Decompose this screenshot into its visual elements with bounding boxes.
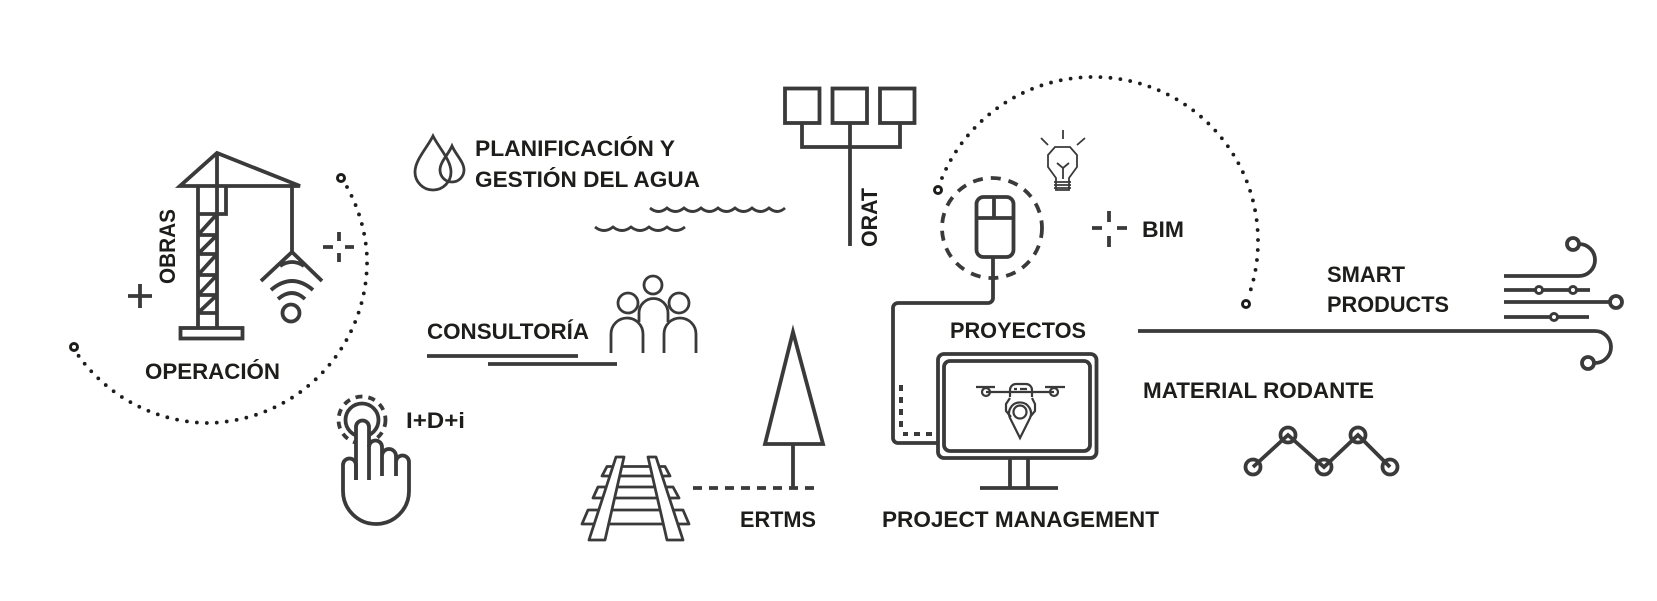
- label: ERTMS: ERTMS: [740, 507, 816, 532]
- icon: org chart: [785, 88, 914, 246]
- label: MATERIAL RODANTE: MATERIAL RODANTE: [1143, 378, 1374, 403]
- icon: tower crane: [180, 153, 300, 338]
- label: SMART PRODUCTS: SMART: [1327, 262, 1406, 287]
- icon: water waves: [595, 208, 785, 230]
- label: I+D+i: I+D+i: [406, 408, 465, 433]
- label: OBRAS: OBRAS: [155, 209, 180, 284]
- label: SMART PRODUCTS: PRODUCTS: [1327, 292, 1449, 317]
- icon: monitor: [938, 354, 1096, 488]
- label: SMART PRODUCTS: [1327, 262, 1449, 317]
- label: CONSULTORÍA: CONSULTORÍA: [427, 319, 589, 344]
- label: ORAT: ORAT: [857, 187, 882, 247]
- heading: planificación y gestión del agua: PLANIFICACIÓN Y: [475, 136, 675, 161]
- icon: drone with pin: [976, 384, 1065, 438]
- icon: lightbulb: [1041, 130, 1085, 190]
- heading: planificación y gestión del agua: GESTIÓN DEL AGUA: [475, 167, 700, 192]
- dashed line to tree: [693, 486, 814, 490]
- label: PROYECTOS: PROYECTOS: [950, 318, 1086, 343]
- icon: water drops: [415, 136, 464, 190]
- cable mouse to monitor: [893, 257, 993, 443]
- icon: signal tree: [765, 332, 823, 488]
- icon: wifi hook: [261, 252, 322, 322]
- icon: mouse in dashed circle: [942, 178, 1042, 278]
- label: PROJECT MANAGEMENT: PROJECT MANAGEMENT: [882, 507, 1160, 532]
- dotted arc: operación: [70, 174, 367, 423]
- dotted connector horizontal: [903, 432, 932, 436]
- icon: dashed cross BIM: [1092, 211, 1127, 247]
- label: OPERACIÓN: OPERACIÓN: [145, 359, 280, 384]
- icon: zigzag nodes: [1246, 428, 1398, 474]
- dotted arc: proyectos: [934, 77, 1258, 308]
- icon: plus sign: [128, 284, 152, 308]
- underline lines: [427, 356, 617, 364]
- icon: people group: [611, 276, 696, 353]
- main line with curl: [1138, 331, 1611, 369]
- icon: dashed cross left: [323, 232, 354, 262]
- dotted connector: [899, 385, 903, 427]
- icon: railway track: [582, 457, 689, 540]
- label: BIM: BIM: [1142, 217, 1184, 242]
- icon: pointing hand: [338, 396, 409, 524]
- icon: wind circuit lines: [1504, 238, 1622, 320]
- heading: planificación y gestión del agua: [475, 136, 700, 192]
